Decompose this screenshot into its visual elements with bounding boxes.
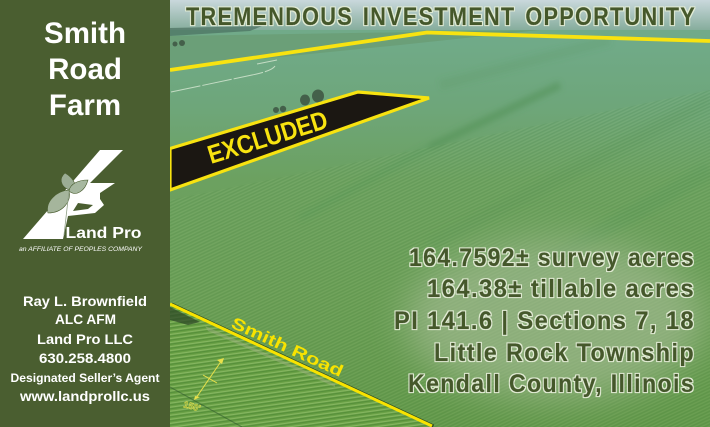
Smith Road label: Smith Road [228,314,346,381]
south field rows [170,305,432,427]
Land Pro logo [19,150,143,253]
agent contact block: 630.258.4800 [39,350,131,366]
farm name heading: Farm [49,89,121,122]
Land Pro logo: Land Pro [66,225,142,242]
property details text: Kendall County, Illinois [408,370,695,398]
property details text [394,244,695,398]
property details text: PI 141.6 | Sections 7, 18 [394,307,695,335]
Land Pro logo: an AFFILIATE OF PEOPLES COMPANY [19,246,143,253]
field track [171,60,277,92]
excluded parcel [170,92,429,190]
agent contact block [10,293,160,404]
sidebar panel [0,0,170,427]
dimension marker: 150' [182,399,202,413]
property boundary north [170,32,710,70]
farm name heading: Smith [44,17,126,50]
agent contact block: www.landprollc.us [19,388,150,404]
dimension marker [182,358,224,413]
farm name heading: Road [48,53,122,86]
agent contact block: Land Pro LLC [37,331,133,347]
agent contact block: Ray L. Brownfield [23,293,147,309]
tree clusters [172,40,324,113]
aerial field photo background [170,0,710,427]
excluded label: EXCLUDED [204,104,331,170]
Smith Road line [170,304,434,426]
agent contact block: Designated Seller’s Agent [10,371,160,385]
property details text: 164.38± tillable acres [427,275,695,303]
property details text: Little Rock Township [434,339,695,367]
agent contact block: ALC AFM [55,311,116,327]
farm name heading [44,17,126,122]
